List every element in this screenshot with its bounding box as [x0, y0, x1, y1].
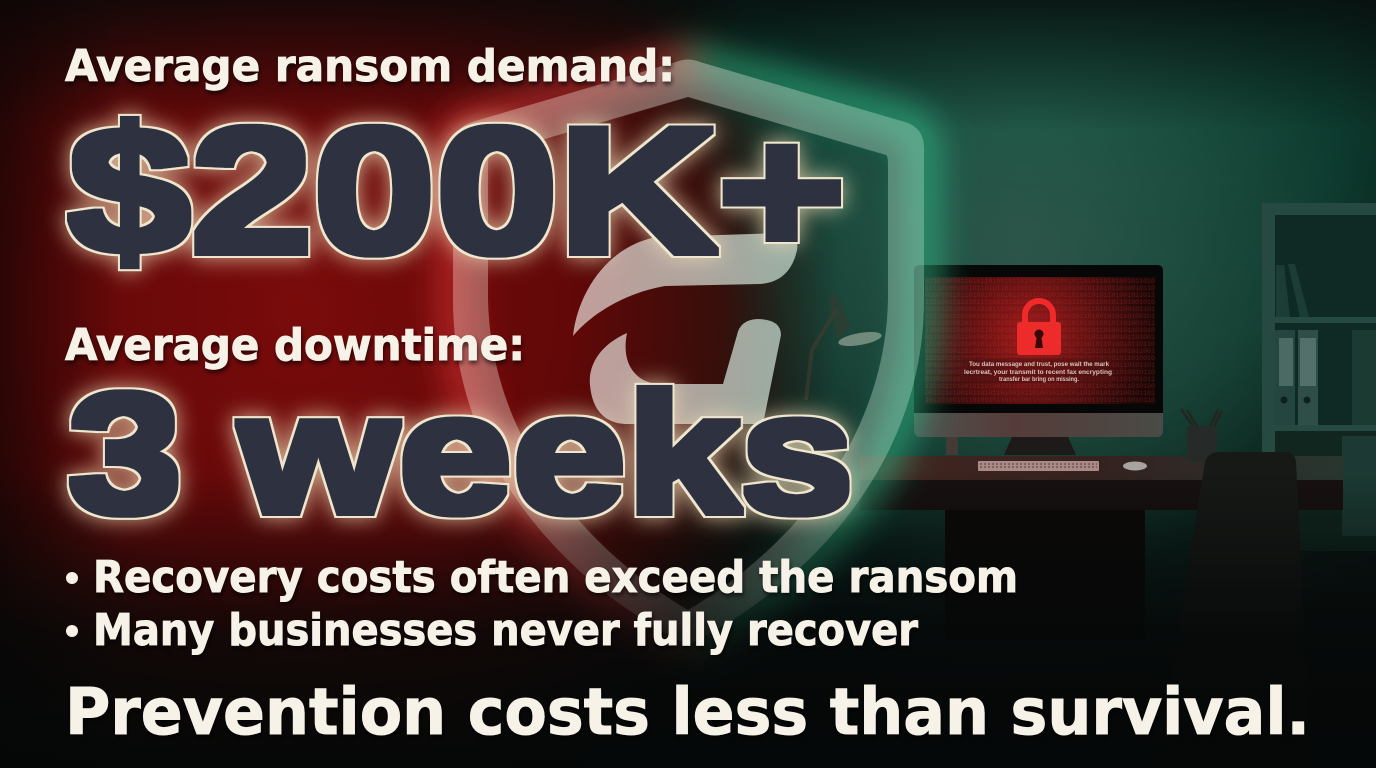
- binary code rows: 0010110100101101011010010110100101101001011010110100101101: [925, 306, 1155, 313]
- stat: $200K+: $200K+: [68, 91, 846, 290]
- chair: [1158, 452, 1310, 768]
- bullet two: Many businesses never fully recover: [93, 605, 918, 656]
- binary code rows: 1101001011010110100101101001011010110100101101001011010010: [925, 355, 1155, 362]
- vignette: [0, 470, 1376, 768]
- binary code rows: 0100101101101001010010110101101001011010010101101001011011: [925, 292, 1155, 299]
- ransom message: [964, 361, 1112, 383]
- desk: [860, 456, 1343, 640]
- binary code rows: 0101101001011010110100100101101001011010110100101101001011: [925, 320, 1155, 327]
- label: average ransom demand: Average ransom demand:: [65, 41, 675, 92]
- bullet list: [66, 552, 1018, 656]
- shield inner mark: [573, 233, 797, 424]
- binary code rows: 1101001011010110100101101001011010010110110100101101001010: [925, 299, 1155, 306]
- binary code rows: 1011010010110100101101001011010010110100101101011010010110: [925, 397, 1155, 404]
- office scene: [806, 203, 1376, 768]
- binary code rows: 0010110100101101001011010110100101101001011010010110101101: [925, 362, 1155, 369]
- binary code rows: 1011010010110100101101001011010110100101101001011010010110: [925, 369, 1155, 376]
- pen cup: [1181, 409, 1222, 462]
- binary code rows: 0110100101101011010010110100110101001011010110101001011010: [925, 278, 1155, 285]
- shield outline: [453, 60, 924, 645]
- label: average downtime: Average downtime:: [65, 320, 525, 371]
- bullet one: Recovery costs often exceed the ransom: [93, 552, 1018, 603]
- binary code rows: 1010010110100101101001011010010110101101001011010010110110: [925, 341, 1155, 348]
- binary code rows: 1100101101001011010010110101101001011010010110100101101010: [925, 327, 1155, 334]
- monitor: [914, 265, 1163, 455]
- stat: 3 weeks: 3 weeks: [68, 359, 854, 549]
- closing statement: Prevention costs less than survival.: [65, 676, 1310, 750]
- binary code rows: [925, 278, 1155, 404]
- bookshelf: [1262, 203, 1376, 551]
- ransom message: transfer bar bring on missing.: [999, 376, 1079, 383]
- ransom message: Tou data message and trust, pose wait the mark: [969, 361, 1109, 368]
- shield glow: [453, 59, 924, 645]
- binary code rows: 0110100101101001011010110100101101001011010110100101101001: [925, 334, 1155, 341]
- binary code rows: 1101011010010110100101101011010010110100101101001011010100: [925, 383, 1155, 390]
- desk lamp: [806, 292, 883, 400]
- binary code rows: 0100101101011010010110100101101001011010110100101101001011: [925, 376, 1155, 383]
- binary code rows: 0101101011010010110100101101001011010010110101101001011001: [925, 348, 1155, 355]
- ransom message: lecrtreat, your transmit to recent fax encrypting: [964, 369, 1112, 376]
- binary code rows: 1011010110100100101101011010010110100101101001010110100101: [925, 313, 1155, 320]
- icon: red padlock: [1017, 301, 1061, 355]
- binary code rows: 0010110100101101011010010110100101101011010010110100101101: [925, 390, 1155, 397]
- keyboard and mouse: [978, 461, 1147, 471]
- binary code rows: 1011010010010110101101001011010010110100101101011010010110: [925, 285, 1155, 292]
